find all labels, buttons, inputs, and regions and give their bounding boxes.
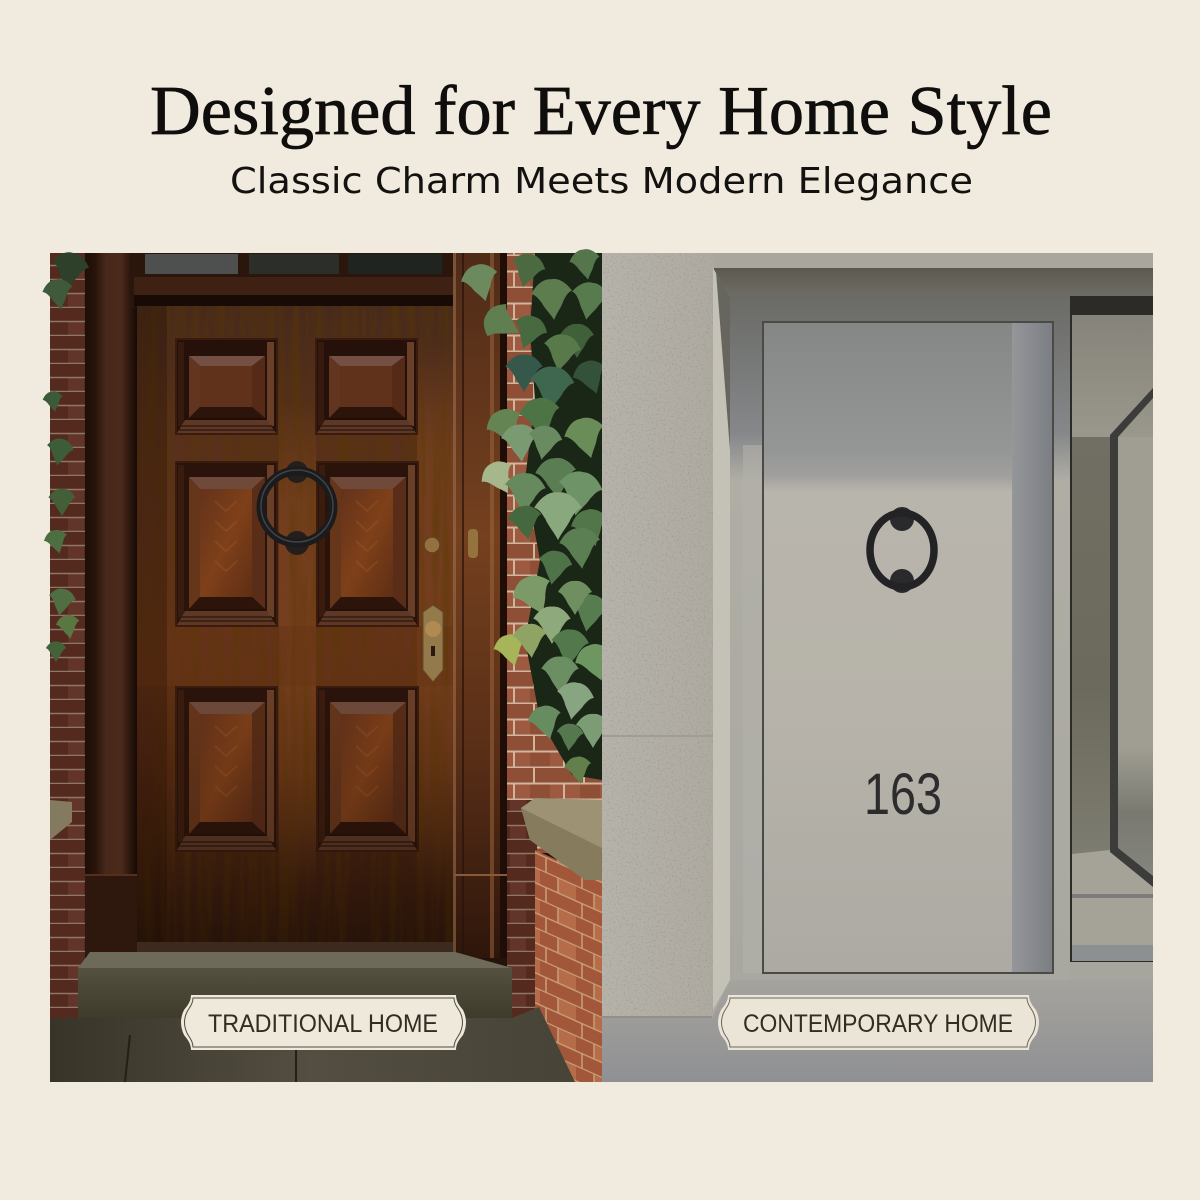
title: Designed for Every Home Style — [150, 73, 1052, 150]
threshold — [137, 942, 455, 952]
door panel: top left — [175, 338, 278, 435]
frame below window — [1070, 962, 1153, 980]
subtitle: Classic Charm Meets Modern Elegance — [230, 161, 973, 202]
brass lock plate and knob — [423, 605, 443, 682]
transom window — [130, 253, 465, 308]
brass door viewer — [468, 529, 478, 558]
door panel: bottom right — [316, 686, 419, 852]
label: traditional home — [181, 995, 466, 1050]
soffit above door — [714, 253, 1153, 296]
label: contemporary home — [718, 995, 1039, 1050]
right brick wall — [507, 253, 602, 853]
stone wall cap, right — [521, 798, 602, 880]
lower brick pier — [507, 800, 537, 1065]
door frame — [730, 296, 1070, 980]
label: contemporary home: CONTEMPORARY HOME — [743, 1010, 1013, 1038]
door panel: middle right — [316, 461, 419, 627]
concrete ground — [602, 980, 1153, 1082]
door bottom darkening — [137, 686, 453, 943]
lower angled brick wall — [535, 850, 602, 1082]
ivy, right side — [458, 247, 619, 786]
door frame, right — [453, 253, 507, 958]
ivy, left side — [41, 249, 91, 662]
stone wall cap, left — [50, 800, 72, 840]
panel: contemporary home photo — [602, 253, 1153, 1082]
left brick wall — [50, 253, 86, 1082]
concrete column — [602, 253, 714, 1018]
recess lit edge with shadow wedge — [713, 268, 730, 1010]
door panel: middle left — [175, 461, 278, 627]
door panel: bottom left — [175, 686, 278, 852]
knocker: contemporary ring — [870, 507, 934, 593]
brass door stud — [424, 537, 440, 553]
side window — [1070, 296, 1153, 963]
stone paving — [50, 1007, 575, 1082]
door panel: top right — [315, 338, 418, 435]
arched door frame, left — [85, 253, 137, 958]
contemporary door leaf — [762, 321, 1054, 974]
panel: traditional home photo — [41, 247, 619, 1082]
house number 163: 163 — [864, 762, 942, 827]
door leaf — [137, 306, 453, 943]
stone step — [78, 952, 512, 1018]
knocker: traditional ring — [261, 461, 333, 555]
label: traditional home: TRADITIONAL HOME — [208, 1010, 438, 1038]
